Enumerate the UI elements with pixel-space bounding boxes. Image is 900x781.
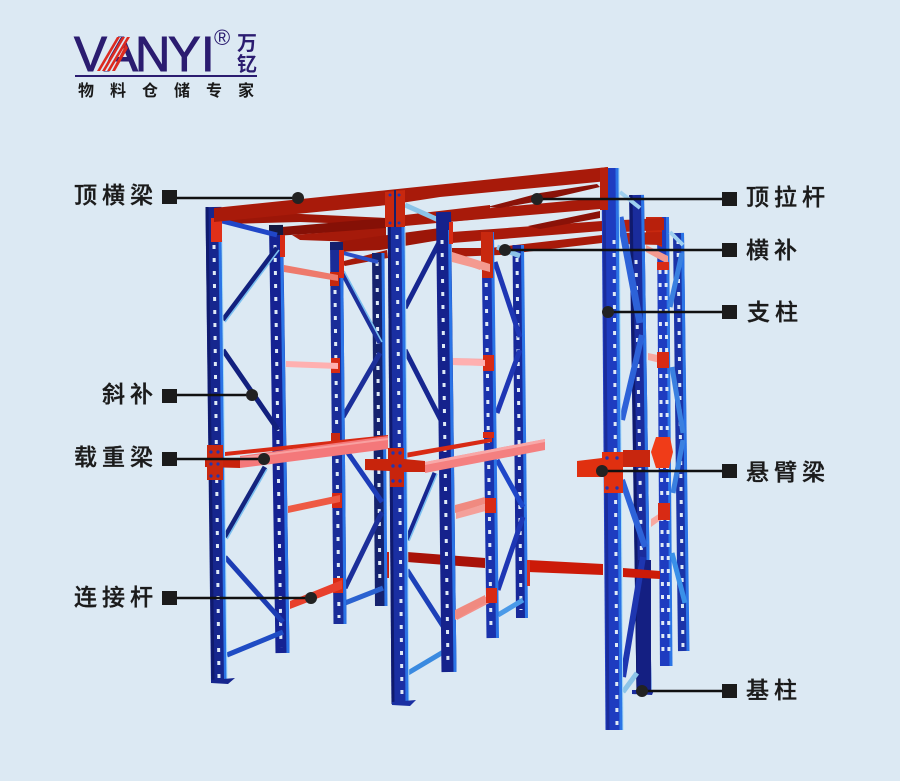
upright frame: centre back [405,205,485,673]
label: 支柱 [602,299,803,325]
connecting bars: lower dark red [385,552,660,586]
label: 顶拉杆 [531,184,830,210]
label: 悬臂梁 [596,459,830,485]
upright frame: centre rear [452,232,526,638]
logo: VANYI 万钇: 物料仓储专家 [78,81,270,100]
upright frame: right front [577,167,623,730]
storage rack illustration [205,167,688,730]
logo: VANYI 万钇: ® [214,25,230,50]
label: 基柱 [636,677,802,703]
logo: VANYI 万钇: 钇 [237,53,257,76]
front load beam, left bay [205,435,388,480]
logo: VANYI 万钇: A [104,28,138,82]
label: 横补: 横补 [746,237,802,263]
label: 支柱: 支柱 [747,299,803,325]
upright frame: centre front [365,190,425,706]
front top beam [214,167,608,222]
label: 横补 [499,237,802,263]
label: 斜补 [102,381,258,407]
label: 载重梁 [74,444,270,470]
upright frame: left rear [330,242,386,624]
front frame left [207,207,283,684]
logo: VANYI 万钇: N [135,28,170,82]
upright frame: rear right [620,192,654,695]
label: 连接杆 [74,584,317,610]
label: 悬臂梁: 悬臂梁 [746,459,830,485]
label: 载重梁: 载重梁 [74,444,158,470]
red top structure: back beams [226,184,664,266]
logo: VANYI 万钇: V [74,28,107,82]
logo: VANYI 万钇: 万 [237,33,257,55]
label: 顶横梁 [74,182,304,208]
label: 基柱: 基柱 [746,677,802,703]
label: 顶拉杆: 顶拉杆 [746,184,830,210]
logo: VANYI 万钇: Y [168,28,201,82]
label: 顶横梁: 顶横梁 [74,182,158,208]
upright frame: far left rear [269,225,288,653]
logo: VANYI 万钇: I [201,28,215,82]
label: 连接杆: 连接杆 [74,584,158,610]
label: 斜补: 斜补 [102,381,158,407]
front load beam, centre bay [405,432,545,473]
far right frame [646,217,688,666]
logo: VANYI 万钇 [74,25,270,100]
pink rung beams, left bay [284,265,342,609]
